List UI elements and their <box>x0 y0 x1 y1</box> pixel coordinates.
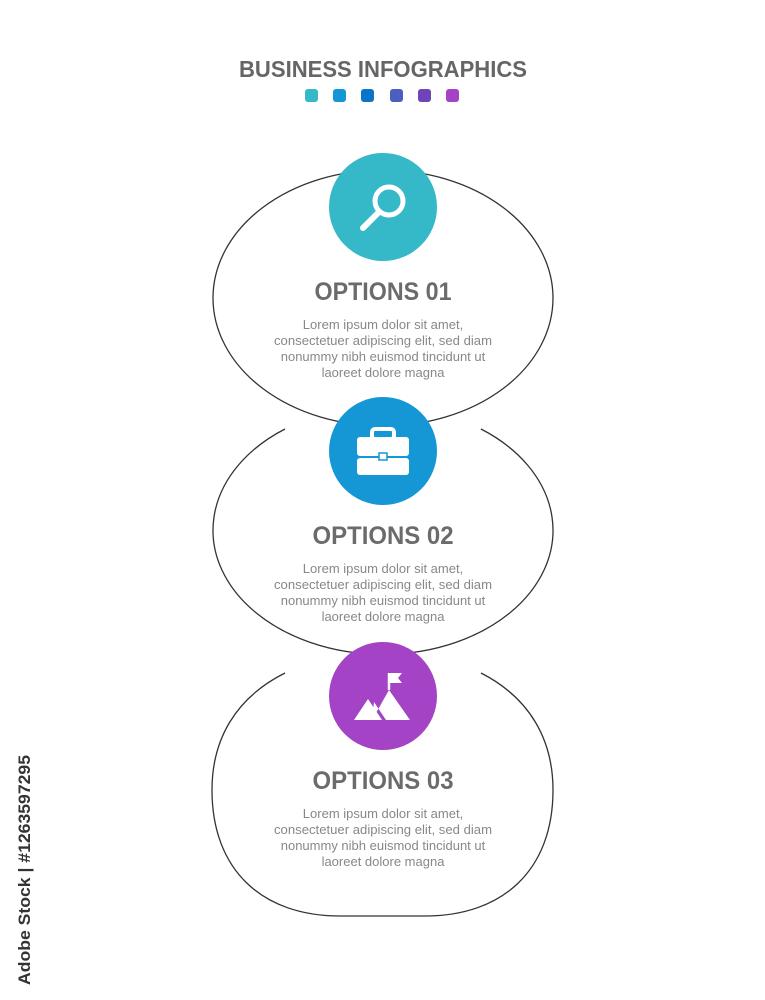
text block 03: laoreet dolore magna <box>322 854 445 869</box>
watermark text: Adobe Stock | #1263597295 <box>15 755 34 985</box>
icon: mountain flag <box>329 642 437 750</box>
panel: option 03 <box>212 642 553 916</box>
text block 02: Lorem ipsum dolor sit amet, <box>303 561 463 576</box>
text block 01: nonummy nibh euismod tincidunt ut <box>281 349 486 364</box>
text block 03 <box>274 806 492 869</box>
text block 02: consectetuer adipiscing elit, sed diam <box>274 577 492 592</box>
text block 02 <box>274 561 492 624</box>
icon: magnifier <box>329 153 437 261</box>
text block 01: consectetuer adipiscing elit, sed diam <box>274 333 492 348</box>
panel: option 02 <box>213 397 553 654</box>
text block 01 <box>274 317 492 380</box>
text block 03: Lorem ipsum dolor sit amet, <box>303 806 463 821</box>
color dots <box>305 89 459 102</box>
text block 02: laoreet dolore magna <box>322 609 445 624</box>
text block 02: nonummy nibh euismod tincidunt ut <box>281 593 486 608</box>
heading: options 02: OPTIONS 02 <box>312 522 454 550</box>
text block 01: laoreet dolore magna <box>322 365 445 380</box>
text block 03: nonummy nibh euismod tincidunt ut <box>281 838 486 853</box>
text block 01: Lorem ipsum dolor sit amet, <box>303 317 463 332</box>
text block 03: consectetuer adipiscing elit, sed diam <box>274 822 492 837</box>
heading: options 03: OPTIONS 03 <box>312 767 454 795</box>
icon: briefcase <box>329 397 437 505</box>
heading: options 01: OPTIONS 01 <box>314 278 452 306</box>
title: BUSINESS INFOGRAPHICS <box>239 56 527 82</box>
panel: option 01 <box>213 153 553 426</box>
